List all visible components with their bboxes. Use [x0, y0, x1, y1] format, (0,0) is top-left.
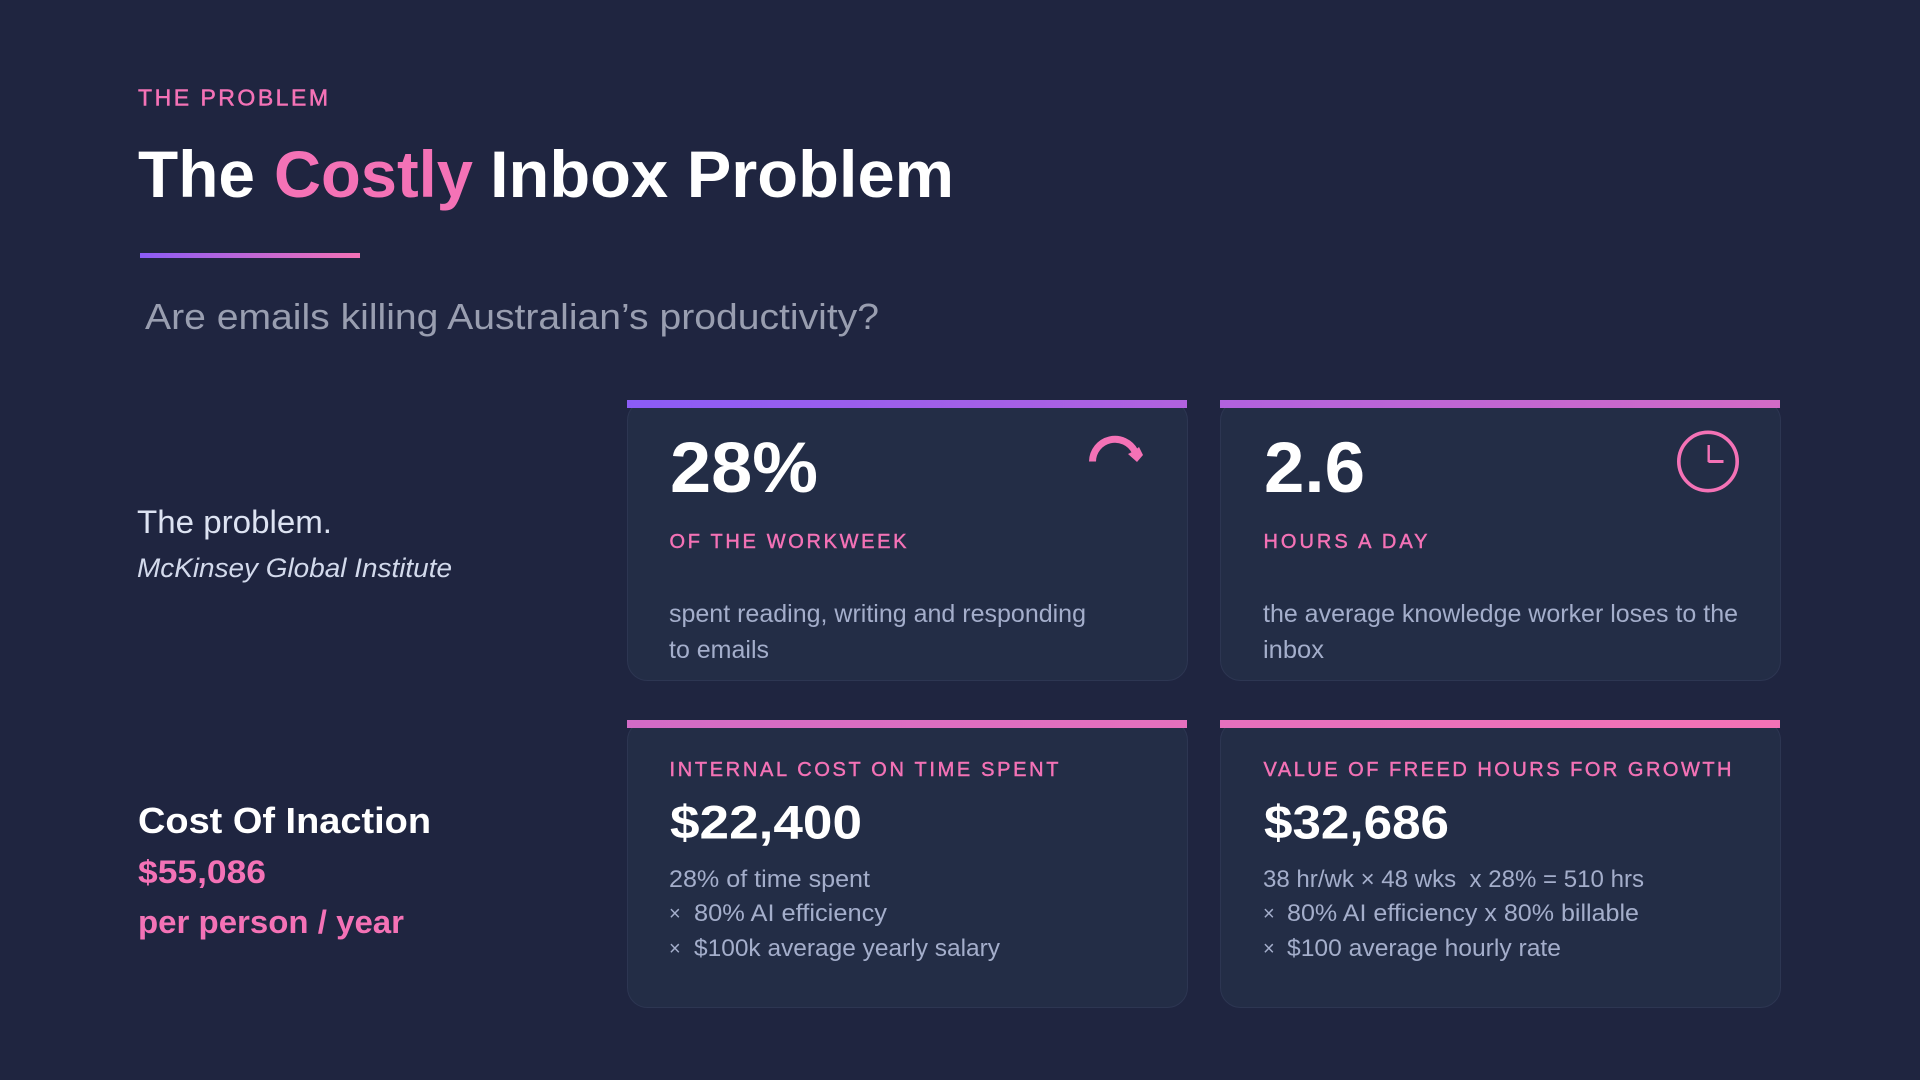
calculation lines [1263, 866, 1644, 962]
label: value of freed hours: VALUE OF FREED HOURS FOR GROWTH [1264, 759, 1732, 781]
stat: 28%: 28% [670, 429, 818, 508]
panel: 28% of the workweek [627, 400, 1188, 680]
calculation lines: 38 hr/wk × 48 wks x 28% = 510 hrs [1263, 866, 1644, 893]
title: Inbox Problem [490, 137, 954, 211]
calculation lines: $100 average hourly rate [1287, 935, 1561, 962]
calculation lines [669, 866, 1000, 962]
title underline [140, 253, 360, 258]
icon: curved arrow [1092, 439, 1143, 462]
description: inbox [1263, 636, 1325, 664]
left block: the problem source: The problem. [137, 504, 332, 540]
label: of the workweek: OF THE WORKWEEK [670, 531, 907, 553]
calculation lines: × [669, 938, 681, 960]
description: to emails [669, 636, 769, 664]
panel: 2.6 hours a day [1220, 400, 1780, 680]
left block: cost of inaction: Cost Of Inaction [138, 800, 431, 841]
description [669, 600, 1086, 664]
icon: clock [1679, 432, 1737, 491]
title: The [138, 137, 255, 211]
calculation lines: × [669, 903, 681, 925]
title: Costly [274, 137, 473, 211]
left block: the problem source: McKinsey Global Institute [137, 553, 452, 583]
calculation lines: 80% AI efficiency [694, 900, 887, 927]
panel: internal cost on time spent [627, 720, 1188, 1008]
calculation lines: × [1263, 938, 1275, 960]
calculation lines: $100k average yearly salary [694, 935, 1000, 962]
description [1263, 600, 1738, 664]
description: spent reading, writing and responding [669, 600, 1086, 628]
description: the average knowledge worker loses to the [1263, 600, 1738, 628]
left block: the problem source [137, 504, 452, 583]
label: hours a day: HOURS A DAY [1264, 531, 1428, 553]
calculation lines: × [1263, 903, 1275, 925]
eyebrow: the problem: THE PROBLEM [138, 84, 328, 110]
calculation lines: 28% of time spent [669, 866, 870, 893]
left block: cost of inaction: per person / year [138, 904, 404, 940]
left block: cost of inaction: $55,086 [138, 854, 266, 890]
value: $22,400: $22,400 [670, 796, 862, 848]
stat: 2.6: 2.6 [1264, 429, 1365, 508]
calculation lines: 80% AI efficiency x 80% billable [1287, 900, 1639, 927]
left block: cost of inaction [138, 800, 431, 940]
panel: value of freed hours [1220, 720, 1780, 1008]
title [138, 137, 954, 211]
subtitle: Are emails killing Australian’s productivity? [145, 296, 879, 337]
value: $32,686: $32,686 [1264, 796, 1449, 848]
label: internal cost: INTERNAL COST ON TIME SPENT [670, 759, 1058, 781]
